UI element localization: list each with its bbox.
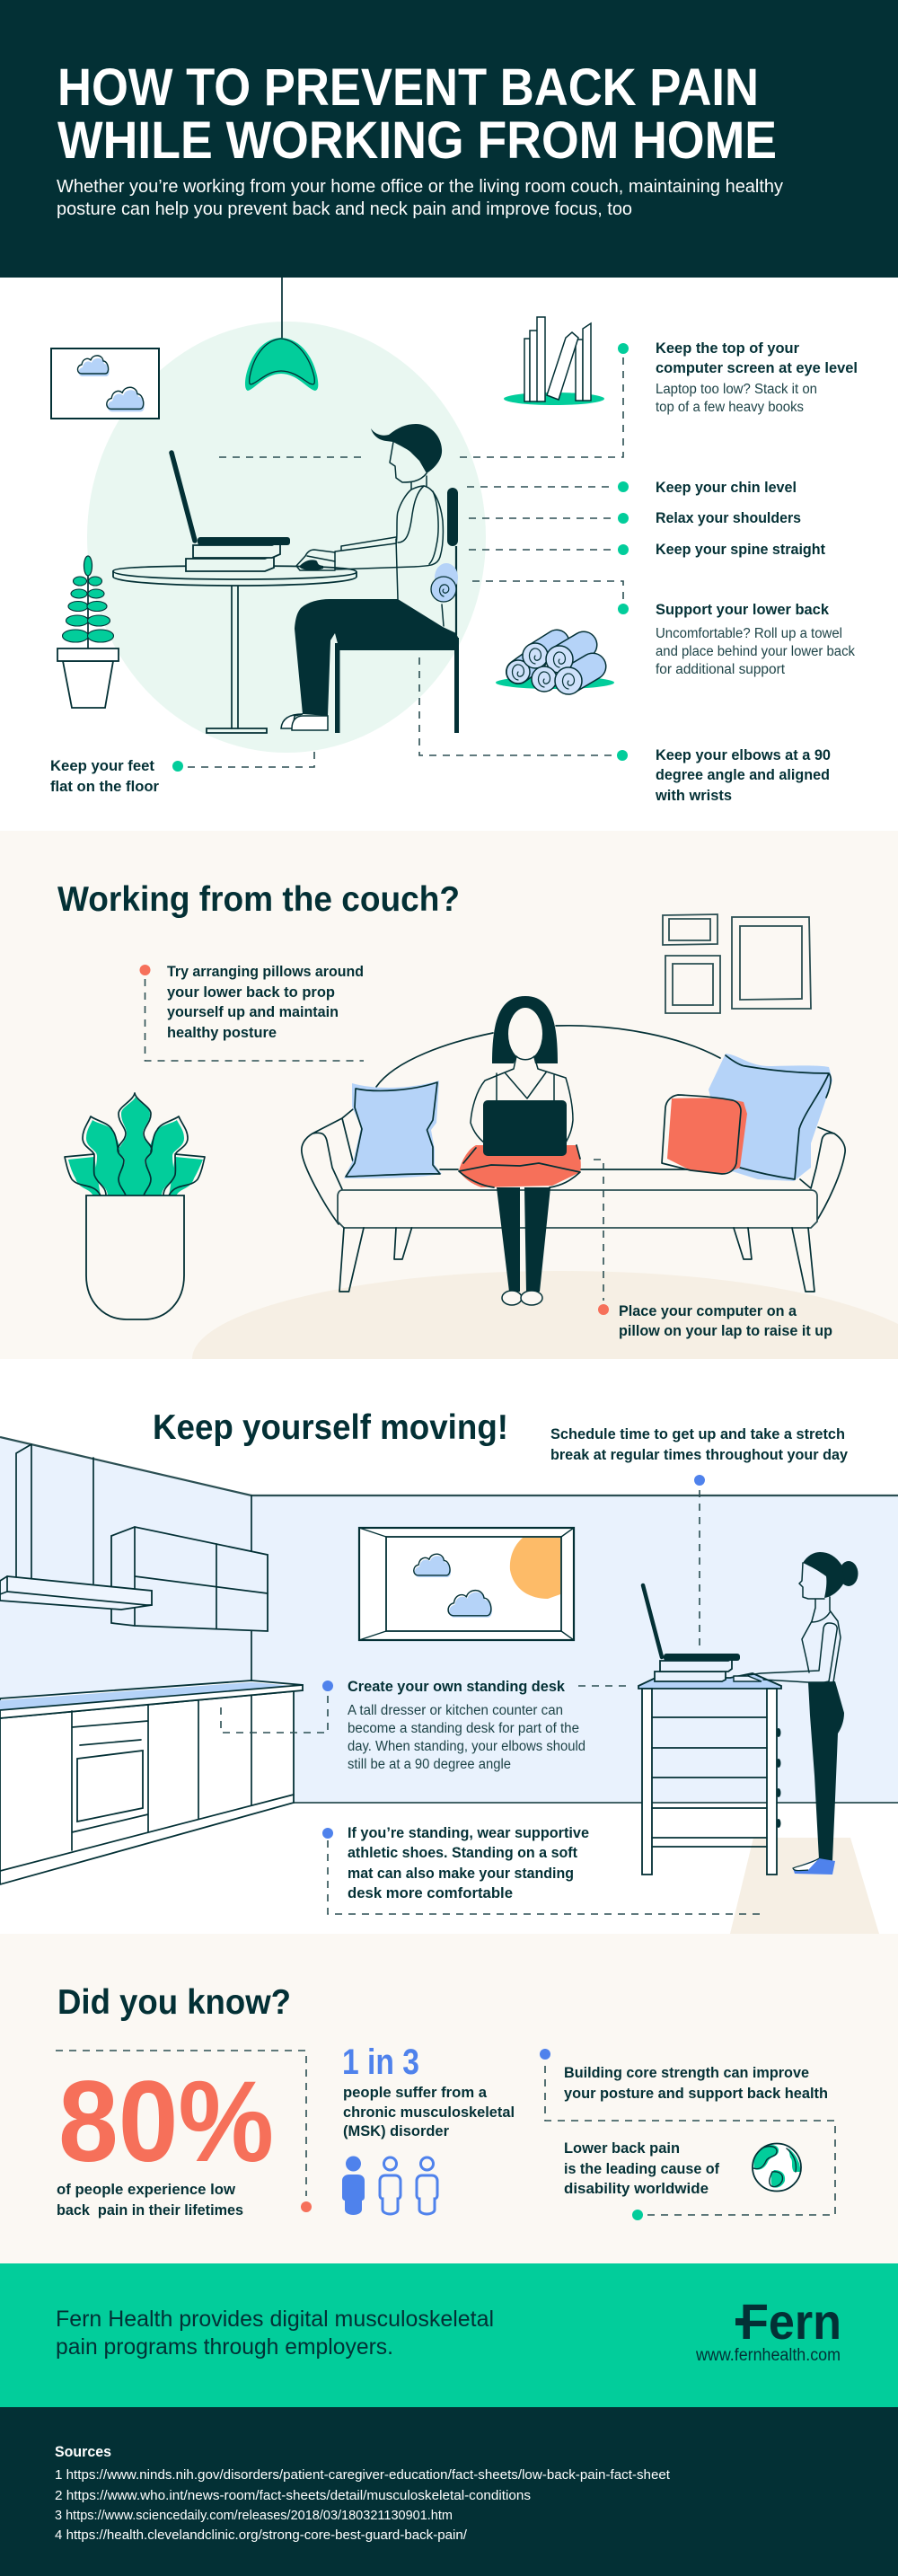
label: standing desk: become a standing desk for part of the bbox=[348, 1721, 579, 1736]
icon: books bbox=[504, 317, 604, 405]
icon: framed clouds bbox=[51, 348, 159, 419]
sources heading: Sources bbox=[55, 2443, 111, 2460]
floor mat bbox=[730, 1838, 879, 1934]
label: disability bbox=[564, 2139, 719, 2197]
label: eye level: Keep the top of your bbox=[656, 340, 799, 357]
panel: header bbox=[0, 0, 898, 278]
wall frames bbox=[663, 914, 811, 1013]
connector: lower back bbox=[472, 581, 629, 614]
tagline: pain programs through employers. bbox=[56, 2334, 393, 2360]
icon: potted plant bbox=[65, 1093, 205, 1319]
illustration: standing woman bbox=[748, 1552, 858, 1875]
icon: globe bbox=[753, 2143, 801, 2192]
label: lower back: and place behind your lower back bbox=[656, 644, 855, 659]
label: lap pillow: Place your computer on a bbox=[619, 1302, 797, 1319]
sources list: 1 https://www.ninds.nih.gov/disorders/patient-caregiver-education/fact-sheets/low-back-pain-fact-sheet bbox=[55, 2467, 671, 2483]
label: elbows: Keep your elbows at a 90 bbox=[656, 746, 831, 763]
sources list bbox=[55, 2467, 671, 2543]
label: standing desk: A tall dresser or kitchen counter can bbox=[348, 1703, 563, 1718]
panel: sources bbox=[0, 2407, 898, 2576]
icon: back support towel bbox=[431, 563, 458, 602]
stat: 1 in 3: people suffer from a bbox=[343, 2084, 488, 2101]
label: standing desk: still be at a 90 degree angle bbox=[348, 1757, 511, 1772]
title: HOW TO PREVENT BACK PAIN bbox=[57, 58, 759, 117]
wall bbox=[0, 1437, 898, 1803]
panel: did you know bbox=[0, 1934, 898, 2263]
label: chin: Keep your chin level bbox=[656, 479, 797, 496]
illustration: base cabinets and counter bbox=[0, 1681, 303, 1884]
title: WHILE WORKING FROM HOME bbox=[57, 111, 777, 170]
label: schedule: Schedule time to get up and take a stretch bbox=[550, 1425, 845, 1442]
stat: 1 in 3: 1 in 3 bbox=[342, 2042, 419, 2082]
subtitle bbox=[57, 176, 784, 219]
label: standing desk: day. When standing, your elbows should bbox=[348, 1739, 585, 1754]
label: lower back: Support your lower back bbox=[656, 601, 830, 618]
icon: desk plant bbox=[57, 556, 119, 708]
background circle bbox=[87, 322, 486, 753]
label: shoes: athletic shoes. Standing on a soft bbox=[348, 1844, 577, 1861]
label: feet: flat on the floor bbox=[50, 778, 159, 795]
label: lap pillow bbox=[619, 1302, 832, 1339]
label: spine: Keep your spine straight bbox=[656, 541, 825, 558]
icon: pendant lamp bbox=[245, 278, 318, 391]
floor shape bbox=[192, 1271, 898, 1359]
label: shoes: If you’re standing, wear supportive bbox=[348, 1824, 589, 1841]
label: feet: Keep your feet bbox=[50, 757, 154, 774]
icon: three people bbox=[342, 2156, 437, 2215]
label: shoulders: Relax your shoulders bbox=[656, 509, 801, 526]
icon: towel stack bbox=[496, 642, 614, 694]
sources list: 2 https://www.who.int/news-room/fact-sheets/detail/musculoskeletal-conditions bbox=[55, 2488, 531, 2503]
logo: Fern: www.fernhealth.com bbox=[695, 2346, 841, 2365]
label: schedule bbox=[550, 1425, 849, 1463]
stat: 1 in 3: (MSK) disorder bbox=[343, 2122, 449, 2139]
label: disability: is the leading cause of bbox=[564, 2160, 719, 2177]
connector: spine bbox=[469, 544, 629, 555]
tagline: Fern Health provides digital musculoskeletal bbox=[56, 2307, 494, 2332]
connector: stat one bbox=[56, 2051, 312, 2212]
panel: couch bbox=[0, 831, 898, 1359]
label: elbows: degree angle and aligned bbox=[656, 766, 830, 783]
label: pillows bbox=[167, 963, 364, 1041]
label: shoes bbox=[348, 1824, 589, 1901]
panel: call to action bbox=[0, 2263, 898, 2407]
logo: Fern bbox=[695, 2293, 841, 2365]
label: pillows: yourself up and maintain bbox=[167, 1003, 339, 1020]
heading: Working from the couch? bbox=[57, 880, 460, 919]
connector: standing desk bbox=[221, 1681, 627, 1733]
label: core strength: Building core strength can improve bbox=[564, 2064, 809, 2081]
label: disability: Lower back pain bbox=[564, 2139, 680, 2157]
illustration: sofa bbox=[302, 1026, 845, 1292]
stat: 1 in 3 bbox=[342, 2042, 515, 2139]
illustration: seated man bbox=[281, 424, 459, 733]
illustration: window bbox=[359, 1528, 574, 1640]
connector: pillows bbox=[140, 965, 364, 1061]
stat: 80 percent: of people experience low bbox=[57, 2181, 236, 2198]
connector: elbows bbox=[419, 657, 628, 761]
connector: chin bbox=[467, 481, 629, 492]
heading: Keep yourself moving! bbox=[153, 1408, 508, 1447]
label: core strength: your posture and support back health bbox=[564, 2085, 828, 2102]
label: lap pillow: pillow on your lap to raise it up bbox=[619, 1322, 832, 1339]
connector: shoulders bbox=[469, 513, 629, 524]
heading: Did you know? bbox=[57, 1983, 291, 2022]
label: core strength bbox=[564, 2064, 828, 2102]
subtitle: posture can help you prevent back and neck pain and improve focus, too bbox=[57, 198, 632, 219]
stat: 80 percent: 80% bbox=[58, 2058, 274, 2186]
illustration: desk and laptop bbox=[113, 453, 357, 733]
icon: left pillow bbox=[344, 1081, 442, 1178]
subtitle: Whether you’re working from your home office or the living room couch, maintaining healthy bbox=[57, 176, 784, 197]
label: lower back bbox=[656, 601, 855, 677]
panel: desk posture bbox=[0, 278, 898, 831]
label: pillows: healthy posture bbox=[167, 1024, 277, 1041]
label: feet bbox=[50, 757, 159, 795]
illustration: seated woman with laptop bbox=[459, 996, 581, 1305]
label: eye level: Laptop too low? Stack it on bbox=[656, 382, 817, 397]
illustration: standing desk bbox=[638, 1585, 781, 1875]
label: elbows: with wrists bbox=[655, 787, 732, 804]
label: shoes: mat can also make your standing bbox=[348, 1865, 574, 1882]
stat: 80 percent: back pain in their lifetimes bbox=[57, 2201, 243, 2219]
label: eye level bbox=[656, 340, 858, 415]
label: disability: disability worldwide bbox=[564, 2180, 709, 2197]
label: pillows: your lower back to prop bbox=[167, 984, 335, 1001]
label: schedule: break at regular times throughout your day bbox=[550, 1446, 849, 1463]
tagline bbox=[56, 2307, 494, 2360]
label: eye level: top of a few heavy books bbox=[656, 400, 804, 415]
connector: eye level bbox=[219, 343, 629, 457]
label: standing desk: Create your own standing desk bbox=[348, 1678, 566, 1695]
label: standing desk bbox=[348, 1678, 585, 1772]
connector: lap pillow bbox=[594, 1160, 609, 1315]
sources list: 3 https://www.sciencedaily.com/releases/2018/03/180321130901.htm bbox=[55, 2508, 453, 2523]
label: shoes: desk more comfortable bbox=[348, 1884, 513, 1901]
label: lower back: Uncomfortable? Roll up a towel bbox=[656, 626, 842, 641]
panel: keep moving bbox=[0, 1359, 898, 1934]
label: lower back: for additional support bbox=[656, 662, 786, 677]
title bbox=[57, 58, 777, 170]
logo: Fern: Fern bbox=[740, 2293, 841, 2350]
label: elbows bbox=[655, 746, 831, 804]
connector: feet bbox=[172, 752, 314, 772]
connector: shoes bbox=[322, 1828, 762, 1914]
label: eye level: computer screen at eye level bbox=[656, 359, 858, 376]
illustration: kitchen cabinets and hood bbox=[0, 1444, 268, 1631]
icon: right pillows bbox=[662, 1054, 832, 1181]
sources list: 4 https://health.clevelandclinic.org/strong-core-best-guard-back-pain/ bbox=[55, 2527, 468, 2543]
connector: core and disability bbox=[540, 2049, 835, 2220]
stat: 1 in 3: chronic musculoskeletal bbox=[343, 2104, 515, 2121]
label: pillows: Try arranging pillows around bbox=[167, 963, 364, 980]
connector: schedule bbox=[694, 1475, 705, 1645]
